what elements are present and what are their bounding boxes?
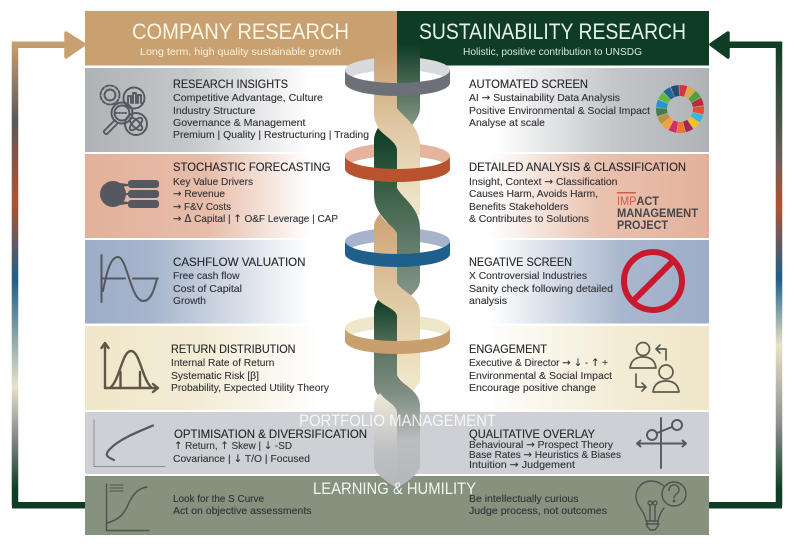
text: qualitative overlay list [469, 439, 621, 471]
logo: impact management project: PROJECT [617, 220, 668, 232]
text: negative screen list [469, 271, 613, 307]
text: detailed analysis list: Benefits Stakeholders [469, 202, 568, 213]
strand: cream to grey [374, 393, 397, 488]
heading: detailed analysis and classification: DETAILED ANALYSIS & CLASSIFICATION [469, 160, 686, 174]
text: learning right list: Be intellectually curious [469, 494, 578, 505]
text: cashflow valuation list: Free cash flow [173, 271, 240, 282]
text: automated screen list: Analyse at scale [469, 118, 545, 129]
text: detailed analysis list: Insight, Context → Classification [469, 176, 618, 188]
ring front: blue [345, 241, 450, 267]
ring back: rust [345, 143, 450, 169]
feedback arrow: right bottom return [709, 502, 782, 508]
panel: automated screen [397, 68, 709, 152]
heading: negative screen: NEGATIVE SCREEN [469, 255, 572, 269]
text: learning left list: Look for the S Curve [173, 494, 264, 505]
text: negative screen list: Sanity check following detailed [469, 284, 613, 295]
icon: light bulb with question mark [636, 481, 686, 530]
text: research insights list: Competitive Advantage, Culture [173, 93, 323, 104]
text: research insights list: Industry Structure [173, 106, 256, 117]
icon: two people exchange arrows [630, 342, 679, 392]
ring back: blue [345, 228, 450, 254]
strand: tan to cream [374, 50, 420, 215]
diagram: intertwined research helix with four rings [345, 45, 450, 488]
text: cashflow valuation list: Growth [173, 296, 206, 307]
feedback arrow: right, sustainability research [711, 33, 779, 505]
strand: dark green to grey [374, 300, 420, 488]
logo: impact management project: MANAGEMENT [617, 208, 698, 220]
text: return distribution list [171, 358, 330, 394]
panel: qualitative overlay [397, 412, 709, 474]
ring front: grey [345, 70, 450, 96]
panel: return distribution [85, 326, 397, 410]
subtitle: sustainability research: Holistic, positive contribution to UNSDG [463, 46, 642, 58]
text: stochastic forecasting list [173, 177, 338, 225]
text: engagement list [469, 357, 612, 394]
text: engagement list: Executive & Director → ↓ - ↑ + [469, 357, 608, 369]
text: automated screen list [469, 92, 650, 129]
heading: optimisation and diversification: OPTIMISATION & DIVERSIFICATION [174, 427, 367, 441]
text: research insights list: Governance & Management [173, 118, 306, 129]
panel: cashflow valuation [85, 240, 397, 324]
text: optimisation list: ↑ Return, ↑ Skew | ↓ -SD [174, 440, 292, 452]
panel: company research header [85, 11, 397, 66]
strand: dark green to sage [374, 128, 420, 298]
icon: s curve chart [106, 484, 149, 530]
icon: UN sustainable development goals wheel [654, 83, 706, 135]
text: learning left list: Act on objective assessments [173, 506, 312, 517]
heading: automated screen: AUTOMATED SCREEN [469, 77, 588, 91]
strand: green top [397, 45, 420, 130]
ring back: grey [345, 57, 450, 83]
feedback arrow: left, company research [15, 33, 84, 505]
text: stochastic forecasting list: Key Value Drivers [173, 177, 253, 188]
text: negative screen list: X Controversial Industries [469, 271, 587, 282]
text: research insights list [173, 93, 369, 141]
text: qualitative overlay list: Base Rates → Heuristics & Biases [469, 449, 621, 461]
text: learning left list [173, 494, 312, 517]
panel: sustainability research header [397, 11, 709, 66]
text: automated screen list: AI → Sustainability Data Analysis [469, 92, 620, 104]
ring front: rust [345, 156, 450, 182]
panel: optimisation and diversification [85, 412, 397, 474]
panel: research insights [85, 68, 397, 152]
panel: learning right [397, 476, 709, 535]
icon: drivers tree [100, 180, 159, 208]
text: detailed analysis list: & Contributes to Solutions [469, 214, 589, 225]
heading: qualitative overlay: QUALITATIVE OVERLAY [469, 427, 595, 441]
panel: engagement [397, 326, 709, 410]
text: qualitative overlay list: Behavioural → Prospect Theory [469, 439, 614, 451]
heading: research insights: RESEARCH INSIGHTS [173, 77, 288, 91]
text: optimisation list: Covariance | ↓ T/O | Focused [173, 453, 310, 465]
feedback arrow: left bottom return [12, 502, 85, 508]
text: return distribution list: Internal Rate of Return [171, 358, 275, 369]
heading: sustainability research: SUSTAINABILITY RESEARCH [419, 19, 686, 44]
icon: prohibition sign [624, 252, 682, 310]
label: learning and humility: LEARNING & HUMILITY [313, 480, 476, 498]
heading: engagement: ENGAGEMENT [469, 342, 548, 356]
icon: sine wave chart [102, 255, 158, 302]
text: qualitative overlay list: Intuition → Judgement [469, 459, 575, 471]
text: engagement list: Encourage positive change [469, 383, 596, 394]
label: portfolio management: PORTFOLIO MANAGEMENT [299, 412, 496, 430]
panel: stochastic forecasting [85, 154, 397, 238]
text: stochastic forecasting list: → Revenue [173, 188, 225, 200]
text: stochastic forecasting list: → Δ Capital | ↑ O&F Leverage | CAP [173, 213, 338, 225]
panel: learning left [85, 476, 397, 535]
text: learning right list [469, 494, 607, 517]
icon: efficient frontier chart [94, 420, 165, 466]
text: automated screen list: Positive Environmental & Social Impact [469, 106, 650, 117]
text: detailed analysis list: Causes Harm, Avoids Harm, [469, 189, 598, 200]
text: stochastic forecasting list: → F&V Costs [173, 201, 231, 213]
text: research insights list: Premium | Quality | Restructuring | Trading [173, 130, 369, 141]
logo: impact management project [617, 192, 698, 232]
text: cashflow valuation list [173, 271, 242, 307]
strand: tan to cream lower [374, 214, 420, 392]
text: optimisation list [173, 440, 310, 465]
text: negative screen list: analysis [469, 296, 507, 307]
icon: axes with two connected points [637, 418, 686, 468]
text: engagement list: Environmental & Social Impact [469, 371, 612, 382]
panel: negative screen [397, 240, 709, 324]
heading: return distribution: RETURN DISTRIBUTION [171, 342, 296, 356]
heading: cashflow valuation: CASHFLOW VALUATION [173, 255, 306, 269]
subtitle: company research: Long term, high quality sustainable growth [140, 46, 341, 58]
ring front: tan [345, 328, 450, 354]
icon: research gears, chart, magnifier and atom [100, 86, 147, 135]
text: learning right list: Judge process, not outcomes [469, 506, 607, 517]
text: cashflow valuation list: Cost of Capital [173, 284, 242, 295]
icon: bell curve distribution [102, 343, 158, 392]
text: detailed analysis list [469, 176, 618, 225]
logo: impact management project: IMPACT [617, 196, 659, 208]
heading: company research: COMPANY RESEARCH [132, 19, 349, 44]
panel: detailed analysis and classification [397, 154, 709, 238]
text: return distribution list: Systematic Risk [β] [171, 371, 259, 382]
ring back: tan [345, 315, 450, 341]
text: return distribution list: Probability, Expected Utility Theory [171, 383, 330, 394]
heading: stochastic forecasting: STOCHASTIC FORECASTING [173, 160, 330, 174]
